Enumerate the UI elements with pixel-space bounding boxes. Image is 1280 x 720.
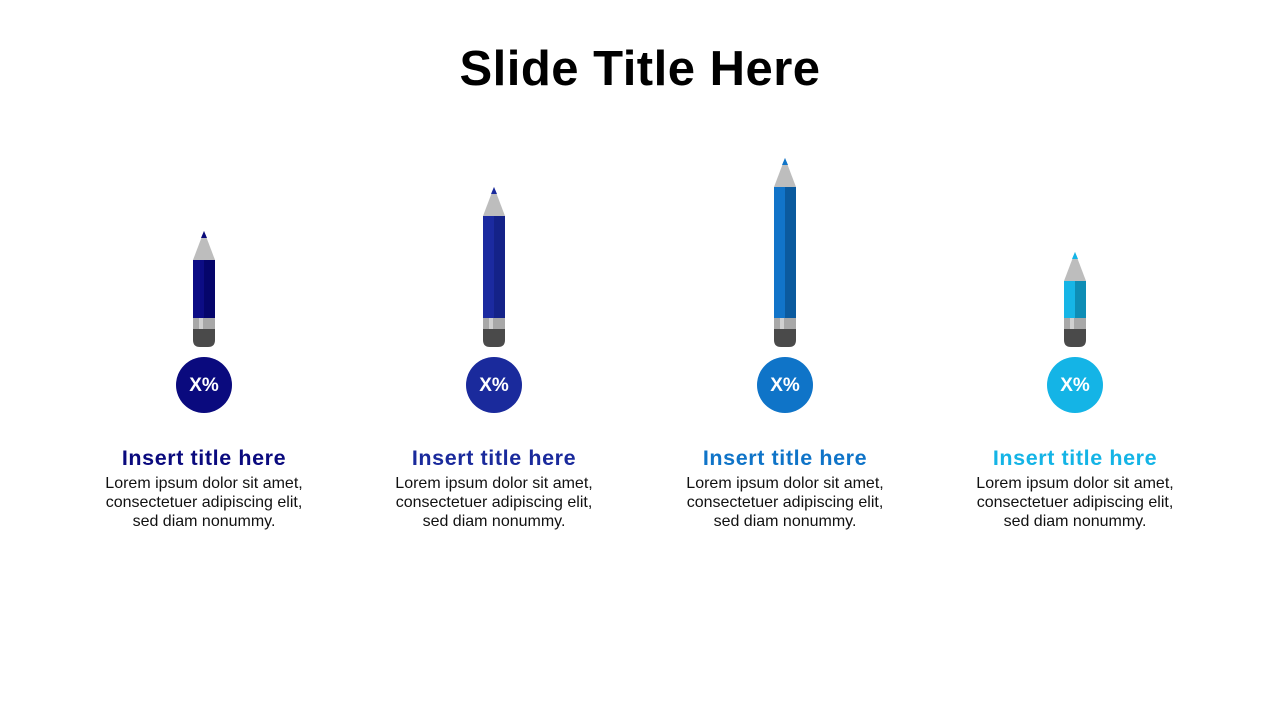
text block 4: Lorem ipsum dolor sit amet, xyxy=(976,475,1174,492)
text block 3 xyxy=(686,446,884,530)
text block 4 xyxy=(976,446,1174,530)
circle 4 xyxy=(1047,357,1103,413)
text block 1: Insert title here xyxy=(122,446,286,470)
text block 4: Insert title here xyxy=(993,446,1157,470)
text block 2: consectetuer adipiscing elit, xyxy=(396,494,592,511)
text block 4: sed diam nonummy. xyxy=(1004,513,1146,530)
circle 4: X% xyxy=(1060,375,1090,396)
text block 3: consectetuer adipiscing elit, xyxy=(687,494,883,511)
text block 4: consectetuer adipiscing elit, xyxy=(977,494,1173,511)
text block 1 xyxy=(105,446,303,530)
text block 2: sed diam nonummy. xyxy=(423,513,565,530)
pencil 4 xyxy=(1064,252,1086,347)
text block 3: Insert title here xyxy=(703,446,867,470)
circle 1 xyxy=(176,357,232,413)
text block 3: Lorem ipsum dolor sit amet, xyxy=(686,475,884,492)
circle 2 xyxy=(466,357,522,413)
pencil 1 xyxy=(193,231,215,347)
circle 2: X% xyxy=(479,375,509,396)
circle 3 xyxy=(757,357,813,413)
text block 1: Lorem ipsum dolor sit amet, xyxy=(105,475,303,492)
pencil 3 xyxy=(774,158,796,347)
text block 1: consectetuer adipiscing elit, xyxy=(106,494,302,511)
pencil 2 xyxy=(483,187,505,347)
text block 3: sed diam nonummy. xyxy=(714,513,856,530)
circle 1: X% xyxy=(189,375,219,396)
title: Slide Title Here xyxy=(459,42,821,96)
text block 2: Insert title here xyxy=(412,446,576,470)
circle 3: X% xyxy=(770,375,800,396)
text block 2: Lorem ipsum dolor sit amet, xyxy=(395,475,593,492)
text block 1: sed diam nonummy. xyxy=(133,513,275,530)
text block 2 xyxy=(395,446,593,530)
